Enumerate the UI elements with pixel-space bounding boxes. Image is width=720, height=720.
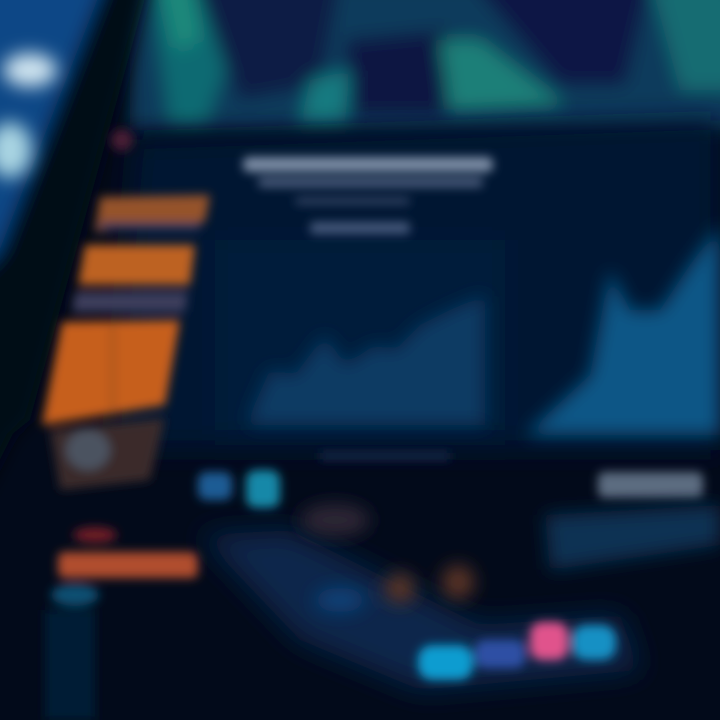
main panel [110,120,720,450]
title block [243,157,493,234]
left blue strip [0,0,150,500]
lower right panel [545,505,720,570]
left area chart [250,295,485,425]
bright buttons [418,622,616,680]
muted keys [300,504,474,612]
lower left orange bar [45,527,198,720]
right area chart [525,225,720,435]
white glow blobs [0,53,57,178]
red dot [111,129,133,151]
top banner [130,0,720,130]
orange panel [42,195,210,490]
lower keyboard band [200,530,640,690]
stat blocks [198,452,703,508]
